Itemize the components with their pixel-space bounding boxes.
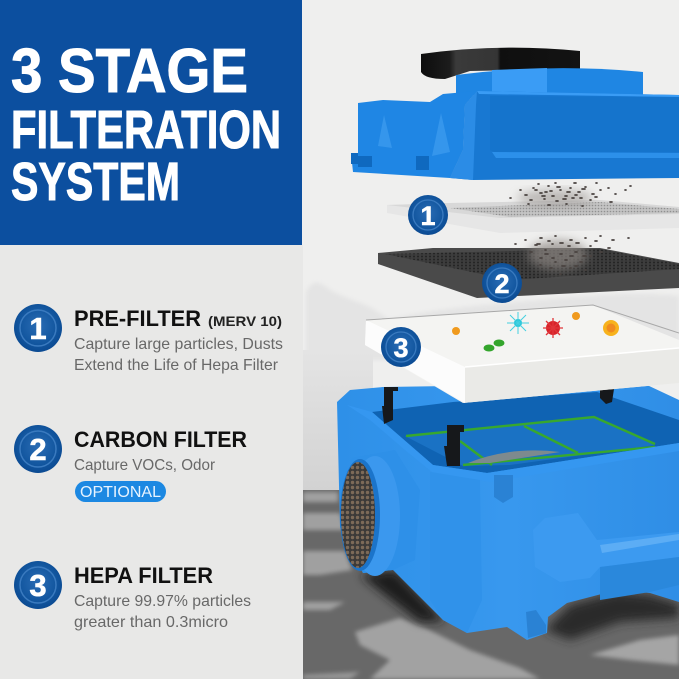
title text: 3 STAGE <box>11 37 248 106</box>
top lid <box>351 68 679 180</box>
marker 2: 2 <box>494 269 510 299</box>
particle icons <box>452 312 619 352</box>
rim <box>347 405 679 482</box>
badge 2 <box>14 425 62 473</box>
title text: SYSTEM <box>11 152 180 212</box>
item: pre-filter: PRE-FILTER <box>74 306 201 331</box>
vent collar <box>340 450 420 573</box>
optional pill: OPTIONAL <box>80 484 161 501</box>
badge 3 <box>14 561 62 609</box>
item: carbon filter <box>74 427 247 502</box>
badge 1: 1 <box>29 311 47 346</box>
item: carbon filter: CARBON FILTER <box>74 427 247 452</box>
item: pre-filter: (MERV 10) <box>208 313 282 329</box>
item: hepa filter: Capture 99.97% particles <box>74 593 251 610</box>
air scrubber base <box>337 385 679 640</box>
marker 3 <box>381 327 421 367</box>
optional pill <box>75 481 166 502</box>
filter 1: pre-filter <box>387 200 679 233</box>
handle <box>533 513 679 582</box>
item: pre-filter: Extend the Life of Hepa Filter <box>74 357 279 374</box>
background wall <box>303 0 679 492</box>
filter 3: hepa filter <box>365 305 679 403</box>
marker 1 <box>408 195 448 235</box>
item: pre-filter <box>74 306 283 374</box>
title text <box>11 37 281 212</box>
badge 2: 2 <box>29 432 47 467</box>
clips <box>382 387 614 466</box>
item: carbon filter: Capture VOCs, Odor <box>74 457 216 474</box>
marker 3: 3 <box>393 333 409 363</box>
item: hepa filter: greater than 0.3micro <box>74 614 228 631</box>
filter 2: carbon filter <box>378 248 679 298</box>
vent mesh <box>341 462 375 568</box>
item: pre-filter: Capture large particles, Dusts <box>74 336 283 353</box>
left info panel <box>0 245 303 679</box>
dust particles <box>510 183 631 274</box>
title text: FILTERATION <box>11 100 281 160</box>
foot <box>526 610 546 638</box>
wet floor <box>303 490 679 679</box>
marker 2 <box>482 263 522 303</box>
black disc <box>421 48 580 79</box>
badge 3: 3 <box>29 568 47 603</box>
title panel <box>0 0 302 245</box>
item: hepa filter <box>74 563 251 631</box>
side face <box>430 472 482 633</box>
marker 1: 1 <box>420 201 436 231</box>
item: hepa filter: HEPA FILTER <box>74 563 213 588</box>
filter cavity <box>372 392 679 473</box>
badge 1 <box>14 304 62 352</box>
